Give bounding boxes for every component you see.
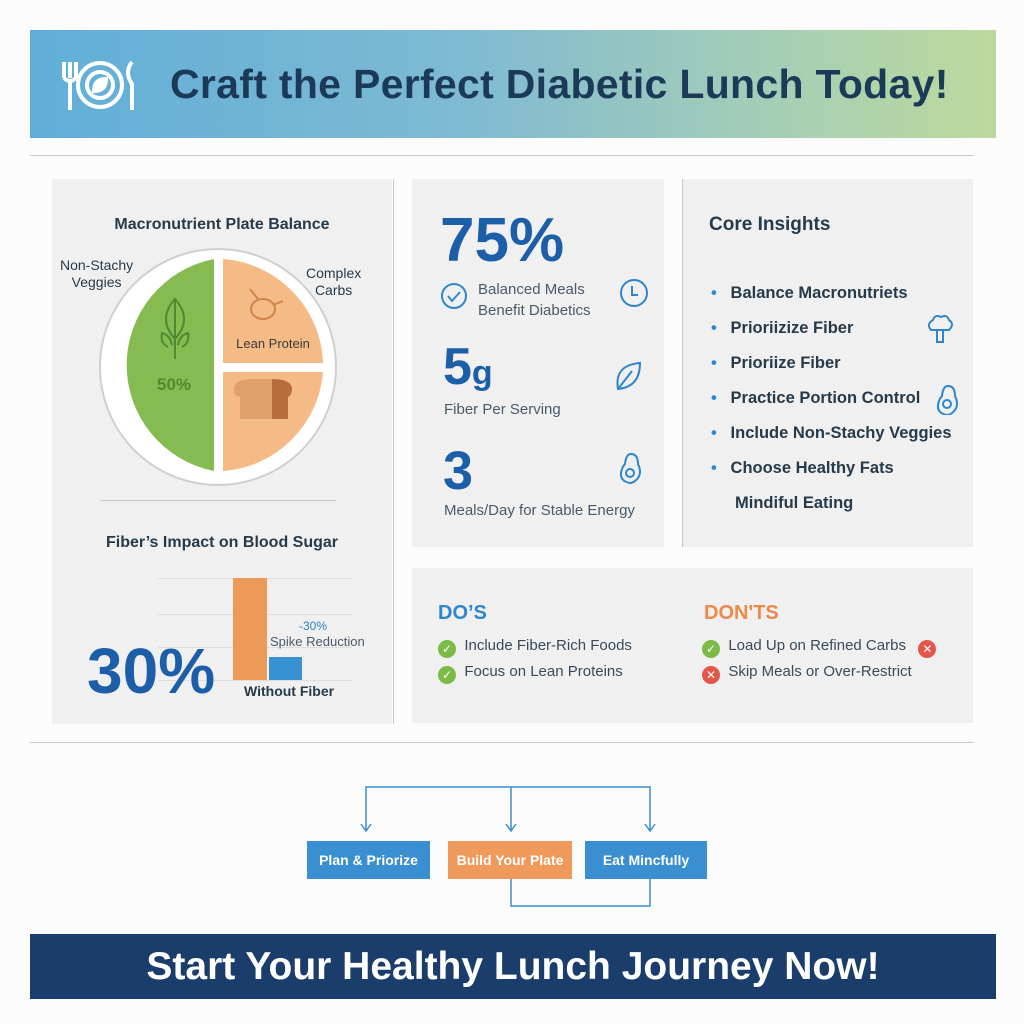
stat: 3: 3 (443, 441, 473, 501)
step: eat: Eat Mincfully (603, 852, 689, 868)
heading: plate: Macronutrient Plate Balance (114, 216, 330, 233)
list: dos: Focus on Lean Proteins (464, 663, 623, 680)
heading: dos: DO’S (438, 602, 487, 624)
heading: fiber: Fiber’s Impact on Blood Sugar (106, 534, 338, 551)
chart: plate: 50% (157, 375, 191, 394)
step: eat (585, 841, 707, 879)
heading: donts: DON'TS (704, 602, 779, 624)
list: donts: ✓ (706, 642, 716, 656)
footer banner (30, 934, 996, 999)
list: dos: Include Fiber-Rich Foods (464, 637, 632, 654)
step: plan: Plan & Priorize (319, 852, 418, 868)
bar chart: Without Fiber (244, 683, 334, 699)
panel: core insights (683, 179, 973, 547)
stat: 75%: 75% (440, 206, 564, 275)
list: insights: • Choose Healthy Fats (711, 459, 894, 477)
heading: core insights: Core Insights (709, 214, 830, 235)
list: insights: • Prioriizize Fiber (711, 319, 853, 337)
list: insights: • Prioriize Fiber (711, 354, 841, 372)
stat: 5g: 5g (443, 338, 493, 396)
label: carbs: Complex (306, 265, 361, 281)
panel: key stats: Balanced Meals (478, 281, 585, 298)
list: donts: ✕ (706, 668, 716, 682)
list: donts: Load Up on Refined Carbs (728, 637, 906, 654)
list: dos (438, 637, 632, 684)
list: insights: • Include Non-Stachy Veggies (711, 424, 952, 442)
label: veggies (60, 257, 134, 290)
label: carbs: Carbs (315, 282, 352, 298)
list: donts: ✕ (922, 642, 932, 656)
footer banner: Start Your Healthy Lunch Journey Now! (146, 945, 880, 988)
bar chart: 30% (87, 635, 215, 707)
panel: dos and donts (412, 568, 973, 723)
list: dos: ✓ (442, 642, 452, 656)
list: dos: ✓ (442, 668, 452, 682)
list: insights: • Balance Macronutriets (711, 284, 908, 302)
label: veggies: Non-Stachy (60, 257, 133, 273)
title: Craft the Perfect Diabetic Lunch Today! (170, 61, 949, 107)
flowchart (307, 786, 707, 907)
list: insights (711, 284, 952, 512)
bar chart (87, 578, 365, 707)
panel: plate and fiber (52, 179, 392, 724)
step: plan (307, 841, 430, 879)
bar chart: -30% (299, 619, 327, 633)
panel: key stats: Meals/Day for Stable Energy (444, 502, 635, 519)
bar chart: Spike Reduction (270, 634, 365, 649)
icon: plate and cutlery (62, 60, 134, 110)
chart: plate: Lean Protein (236, 336, 310, 351)
panel: key stats (412, 179, 664, 547)
step: build: Build Your Plate (457, 852, 563, 868)
list: donts (702, 637, 936, 684)
label: carbs (306, 265, 361, 298)
chart: plate (99, 248, 337, 486)
icon: broccoli (928, 315, 953, 343)
icon: avocado (936, 385, 958, 415)
connectors (360, 786, 656, 907)
panel: key stats: Benefit Diabetics (478, 302, 591, 319)
list: insights: Mindiful Eating (735, 494, 853, 512)
label: veggies: Veggies (72, 274, 121, 290)
step: build (448, 841, 572, 879)
list: donts: Skip Meals or Over-Restrict (728, 663, 912, 680)
header banner (30, 30, 996, 138)
list: insights: • Practice Portion Control (711, 389, 920, 407)
panel: key stats: Fiber Per Serving (444, 401, 561, 418)
